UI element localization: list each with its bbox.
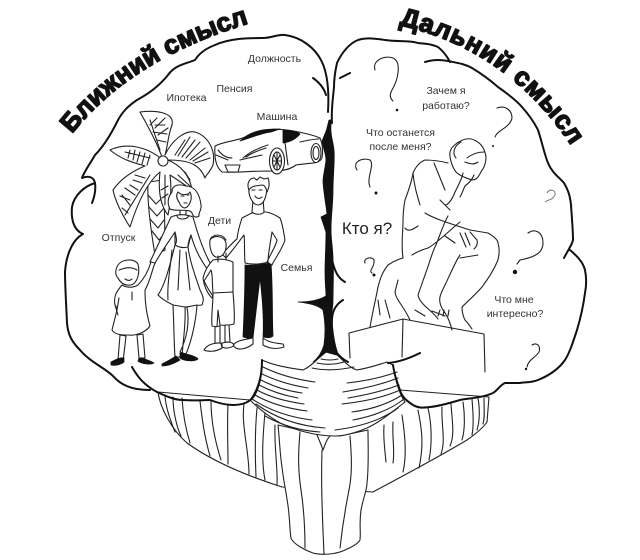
question mark 1: [375, 57, 398, 111]
man: [222, 177, 285, 349]
heading: far meaning: Дальний смысл: [397, 8, 582, 145]
question: what remains, line 2: после меня?: [369, 141, 432, 153]
label: car: Машина: [257, 111, 297, 123]
heading: near meaning: Ближний смысл: [58, 10, 248, 134]
label: pension: Пенсия: [216, 83, 252, 95]
car wheels: [270, 144, 321, 174]
palm trunk: [148, 180, 165, 255]
cerebellum and brain stem: [158, 390, 489, 554]
left hemisphere: [65, 35, 328, 405]
question marks: [356, 57, 555, 370]
question mark 2: [492, 107, 512, 147]
labels: far meaning: [342, 85, 543, 320]
label: vacation: Отпуск: [102, 232, 136, 244]
thinker figure: [370, 139, 499, 330]
question: why do I work: Зачем я: [426, 85, 466, 97]
question mark 6: [545, 190, 555, 202]
woman: [150, 185, 212, 366]
palm tree: [110, 111, 214, 255]
question: what interests me, line 2: интересно?: [487, 308, 543, 320]
question: what remains: Что останется: [366, 127, 435, 139]
question: who am I: Кто я?: [342, 219, 392, 238]
thinker statue: [349, 139, 499, 372]
label: children: Дети: [208, 215, 231, 227]
boy: [203, 235, 234, 351]
labels: near meaning: [102, 53, 312, 274]
family: [111, 177, 285, 366]
central fissure: [298, 120, 337, 362]
question mark 7: [525, 344, 540, 370]
pons band: [250, 352, 405, 436]
question mark 3: [356, 159, 378, 194]
label: family: Семья: [281, 262, 312, 274]
brain stem: [278, 425, 368, 554]
question mark 4: [365, 258, 376, 276]
question: why do I work, line 2: работаю?: [422, 100, 470, 112]
right hemisphere: [332, 38, 586, 408]
sports car: [215, 129, 323, 174]
girl: [111, 260, 155, 365]
question: what interests me: Что мне: [494, 294, 534, 306]
label: mortgage: Ипотека: [166, 92, 207, 104]
label: position: Должность: [248, 53, 302, 65]
question mark 5: [513, 231, 543, 274]
palm fronds: [110, 111, 214, 227]
pedestal: [349, 319, 485, 372]
cerebellum: [158, 390, 489, 492]
